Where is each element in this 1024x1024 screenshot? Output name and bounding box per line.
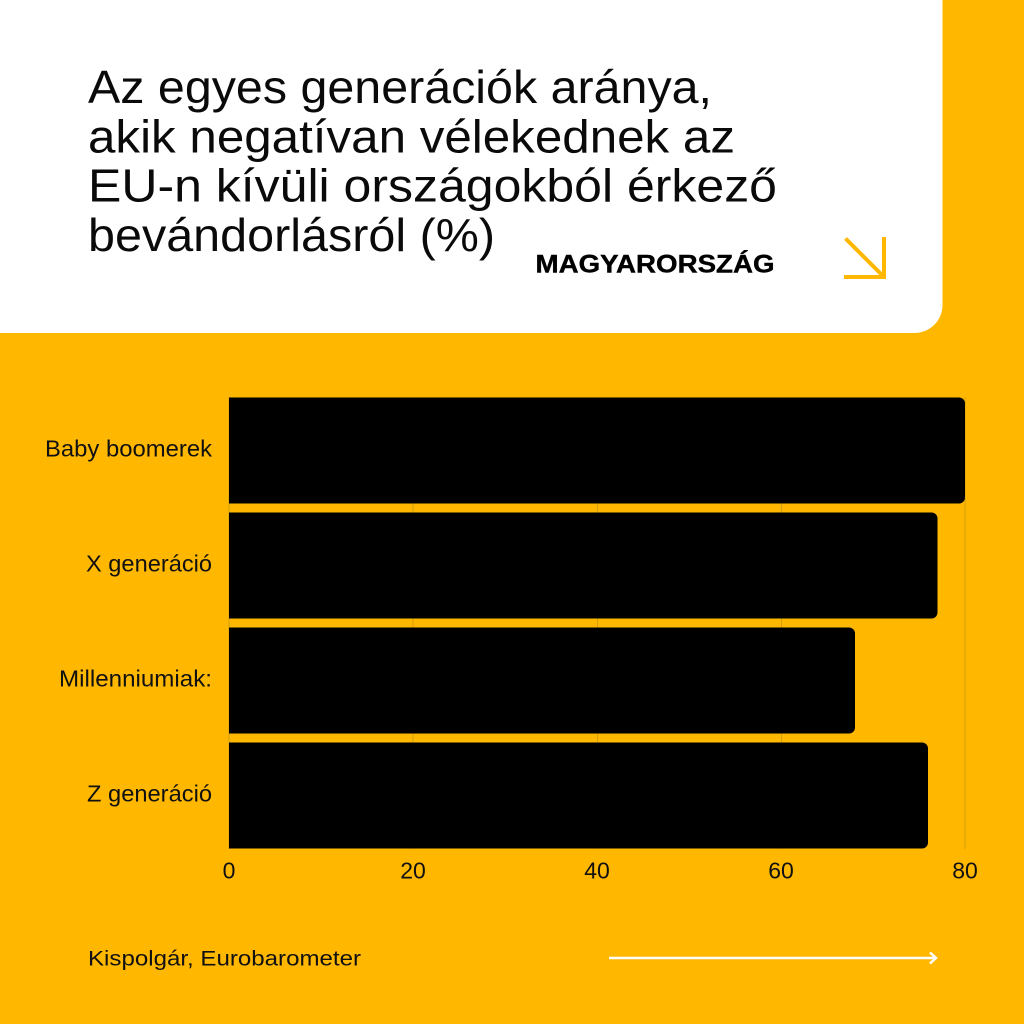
- axis labels: 80: [952, 857, 978, 883]
- country label: MAGYARORSZÁG: [536, 249, 774, 278]
- title: bevándorlásról (%): [88, 209, 495, 261]
- source: Kispolgár, Eurobarometer: [88, 947, 361, 971]
- category labels: Z generáció: [87, 781, 212, 807]
- icon: right arrow: [609, 952, 936, 964]
- axis labels: 20: [400, 857, 426, 883]
- axis labels: 0: [223, 857, 235, 883]
- title: [88, 61, 777, 261]
- category labels: [45, 436, 213, 807]
- bar: X generáció 77: [229, 512, 938, 618]
- category labels: Baby boomerek: [45, 436, 213, 462]
- category labels: Millenniumiak:: [59, 666, 212, 692]
- title: akik negatívan vélekednek az: [88, 110, 735, 162]
- axis labels: [223, 857, 978, 883]
- axis labels: 60: [768, 857, 794, 883]
- grid lines: [229, 397, 965, 849]
- category labels: X generáció: [86, 551, 212, 577]
- title: EU-n kívüli országokból érkező: [88, 160, 777, 212]
- bar: Baby boomerek 80: [229, 398, 965, 504]
- title: Az egyes generációk aránya,: [88, 61, 712, 113]
- icon: down-right arrow: [844, 237, 884, 277]
- bar: Z generáció 76: [229, 742, 928, 848]
- axis labels: 40: [584, 857, 610, 883]
- panel: white header: [0, 0, 942, 333]
- bar chart: [45, 397, 978, 883]
- bar: Millenniumiak 68: [229, 628, 855, 734]
